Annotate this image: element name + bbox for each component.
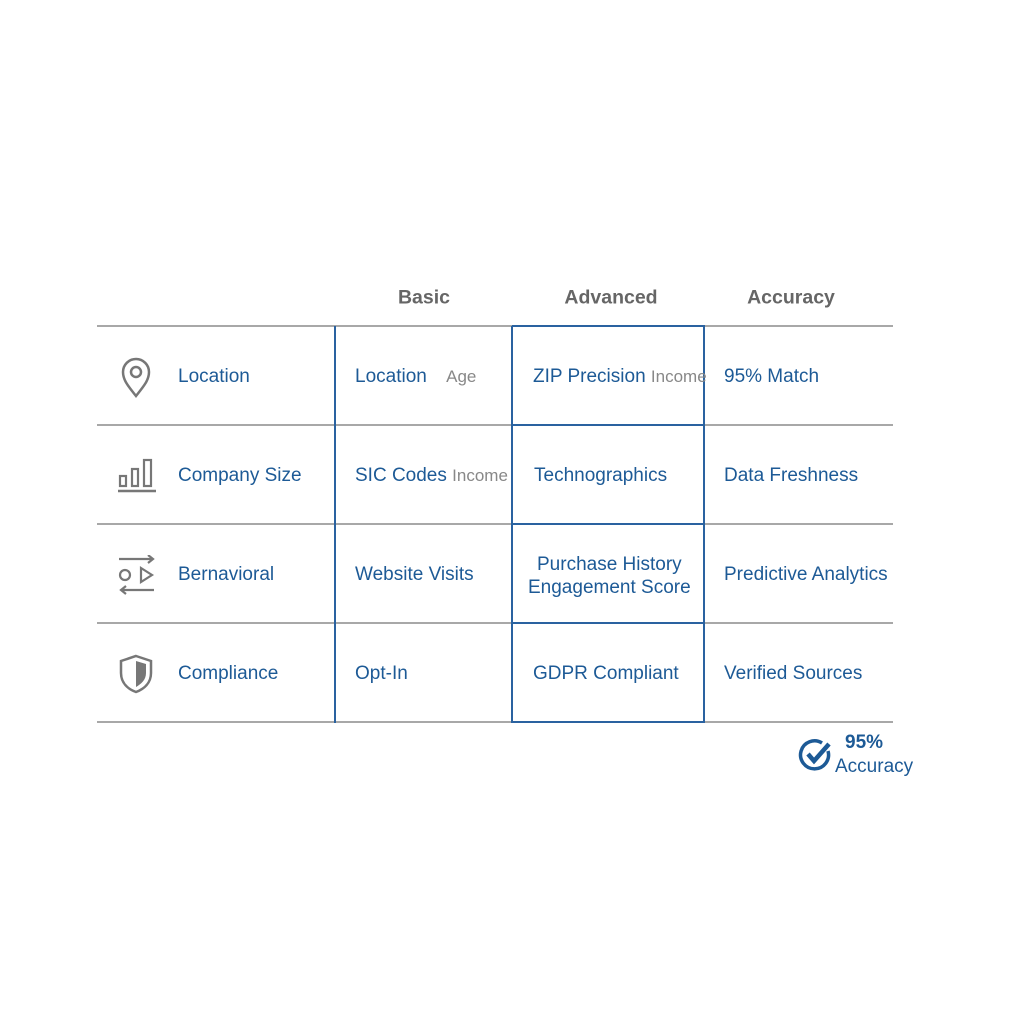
header: Accuracy: Accuracy — [747, 286, 835, 308]
icon: bar chart — [118, 458, 156, 492]
cell: Purchase History Engagement Score — [528, 554, 691, 598]
header: Advanced: Advanced — [564, 286, 658, 308]
cell: GDPR Compliant: GDPR Compliant — [533, 663, 679, 684]
cell: Website Visits: Website Visits — [355, 564, 474, 585]
row label: Location: Location — [178, 366, 250, 387]
cell: Location Age: Location Age — [355, 366, 476, 387]
cell: Data Freshness: Data Freshness — [724, 465, 858, 486]
cell: Opt-In: Opt-In — [355, 663, 408, 684]
row label: Bernavioral: Bernavioral — [178, 564, 274, 585]
row label: Compliance: Compliance — [178, 663, 278, 684]
icon: behavioral arrows — [118, 555, 155, 595]
text: 95%: 95% — [845, 732, 883, 753]
badge: 95% Accuracy — [798, 732, 913, 777]
cell: 95% Match: 95% Match — [724, 366, 819, 387]
icon: shield — [120, 654, 152, 694]
cell: SIC Codes Income: SIC Codes Income — [355, 465, 508, 486]
header: Basic: Basic — [398, 286, 450, 308]
icon: location pin — [122, 358, 150, 398]
cell: Purchase History Engagement Score: Purchase History — [537, 554, 682, 575]
row label: Company Size: Company Size — [178, 465, 302, 486]
icon: check circle — [798, 739, 831, 771]
cell: Purchase History Engagement Score: Engagement Score — [528, 577, 691, 598]
cell: Predictive Analytics: Predictive Analytics — [724, 564, 888, 585]
cell: ZIP Precision Income: ZIP Precision Income — [533, 366, 707, 387]
cell: Verified Sources: Verified Sources — [724, 663, 862, 684]
text: Accuracy: Accuracy — [835, 756, 913, 777]
cell: Technographics: Technographics — [534, 465, 667, 486]
